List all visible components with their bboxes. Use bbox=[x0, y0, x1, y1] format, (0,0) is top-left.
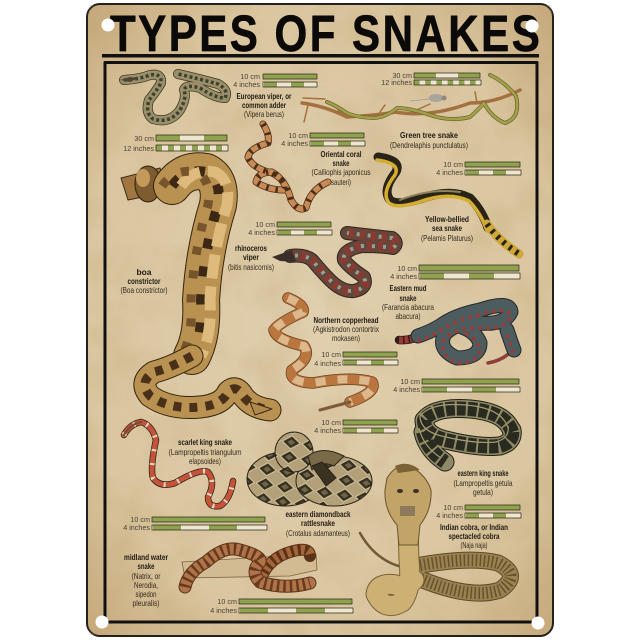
label: European viper: European viper, or bbox=[236, 91, 292, 101]
snake: Eastern mud snake bbox=[399, 305, 514, 363]
label: scarlet king snake: scarlet king snake bbox=[178, 437, 232, 447]
label: Oriental coral snake bbox=[312, 149, 370, 187]
label: European viper bbox=[236, 91, 292, 119]
label: rhinoceros viper bbox=[228, 243, 274, 272]
label: Indian cobra: spectacled cobra bbox=[448, 531, 500, 541]
label: boa constrictor: (Boa constrictor) bbox=[120, 285, 168, 295]
scale bar: Oriental coral snake: 10 cm bbox=[288, 131, 308, 140]
label: boa constrictor bbox=[120, 267, 168, 295]
mounting holes bbox=[96, 18, 544, 630]
label: Oriental coral snake: sauteri) bbox=[331, 177, 351, 187]
label: Green tree snake bbox=[390, 130, 468, 150]
scale bar: eastern diamondback rattlesnake: 10 cm bbox=[321, 418, 341, 427]
snake: scarlet king snake bbox=[124, 422, 233, 506]
scale bar: viper: 10 cm bbox=[240, 72, 260, 81]
scale bar: Indian cobra: 10 cm bbox=[443, 503, 463, 512]
scale bar: scarlet king snake: 4 inches bbox=[123, 523, 150, 532]
scale bar: Northern copperhead: 10 cm bbox=[321, 350, 341, 359]
label: Eastern mud snake bbox=[382, 283, 434, 321]
sign plate bbox=[87, 4, 553, 636]
label: Indian cobra bbox=[440, 522, 508, 550]
scale bar: boa bbox=[123, 134, 228, 153]
scale bar: viper bbox=[233, 72, 317, 89]
label: Eastern mud snake: (Farancia abacura bbox=[382, 302, 434, 312]
label: Oriental coral snake: Oriental coral bbox=[320, 149, 362, 159]
scale bar: Eastern mud snake: 10 cm bbox=[397, 264, 417, 273]
label: Yellow-bellied sea snake bbox=[421, 214, 473, 243]
label: eastern diamondback rattlesnake: (Crotalus adamanteus) bbox=[286, 528, 350, 538]
snake: European viper bbox=[120, 74, 226, 120]
label: eastern king snake: getula) bbox=[473, 487, 493, 497]
scale bar: Indian cobra: 4 inches bbox=[436, 511, 463, 520]
label: Green tree snake: (Dendrelaphis punctulatus) bbox=[390, 140, 468, 150]
label: midland water snake: sipedon bbox=[136, 589, 157, 599]
scale bar: Eastern mud snake: 4 inches bbox=[390, 272, 417, 281]
snake: Yellow-bellied sea snake bbox=[377, 157, 519, 254]
scale bar: Oriental coral snake bbox=[281, 131, 365, 148]
scale bar: eastern king snake: 4 inches bbox=[393, 385, 420, 394]
scale bar: rhinoceros viper: 10 cm bbox=[255, 220, 275, 229]
label: eastern diamondback rattlesnake bbox=[286, 509, 351, 538]
label: Northern copperhead bbox=[313, 315, 380, 343]
scale bar: Indian cobra bbox=[436, 503, 521, 520]
snake: Green tree snake on branch bbox=[302, 75, 520, 123]
scale bar: rhinoceros viper bbox=[248, 220, 332, 237]
label: scarlet king snake: elapsoides) bbox=[189, 456, 221, 466]
snake: Northern copperhead bbox=[274, 298, 373, 410]
label: Eastern mud snake: Eastern mud bbox=[390, 283, 426, 293]
label: midland water snake: Nerodia, bbox=[134, 580, 158, 590]
label: Yellow-bellied sea snake: Yellow-bellied bbox=[425, 214, 469, 224]
label: Indian cobra: (Naja naja) bbox=[460, 540, 488, 550]
icon: mouse bbox=[411, 94, 446, 102]
label: eastern king snake: eastern king snake bbox=[458, 468, 509, 478]
snake: Indian cobra bbox=[360, 464, 511, 606]
label: boa constrictor: constrictor bbox=[128, 276, 161, 286]
label: scarlet king snake: (Lampropeltis triangulum bbox=[168, 447, 242, 457]
label: midland water snake: snake bbox=[138, 561, 155, 571]
snake: rhinoceros viper bbox=[272, 233, 396, 291]
scale bar: scarlet king snake: 10 cm bbox=[130, 515, 150, 524]
label: Northern copperhead: mokasen) bbox=[332, 333, 360, 343]
scale bar: Northern copperhead bbox=[314, 350, 398, 368]
label: eastern diamondback rattlesnake: eastern diamondback bbox=[286, 509, 351, 519]
snake: midland water snake on branch bbox=[182, 549, 317, 587]
scale bar: Yellow-bellied sea snake: 10 cm bbox=[443, 160, 463, 169]
scale bar: Green tree snake: 12 inches bbox=[381, 78, 412, 87]
scale bar: Northern copperhead: 4 inches bbox=[314, 359, 341, 368]
scale bar: Yellow-bellied sea snake: 4 inches bbox=[436, 168, 463, 177]
scale bar: Eastern mud snake bbox=[390, 264, 520, 281]
label: Yellow-bellied sea snake: sea snake bbox=[432, 223, 462, 233]
label: Eastern mud snake: abacura) bbox=[396, 311, 421, 321]
scale bar: Green tree snake: 30 cm bbox=[392, 71, 412, 80]
label: European viper: (Vipera berus) bbox=[244, 109, 284, 119]
scale bar: midland water snake: 10 cm bbox=[217, 597, 237, 606]
label: boa constrictor: boa bbox=[136, 267, 152, 277]
label: eastern king snake bbox=[454, 468, 513, 497]
scale bar: viper: 4 inches bbox=[233, 80, 260, 89]
label: Eastern mud snake: snake bbox=[400, 293, 417, 303]
scale bar: eastern diamondback rattlesnake: 4 inches bbox=[314, 426, 341, 435]
label: Oriental coral snake: (Calliophis japonicus bbox=[312, 167, 370, 177]
label: eastern diamondback rattlesnake: rattlesnake bbox=[301, 518, 335, 528]
label: midland water snake bbox=[124, 552, 168, 608]
label: Northern copperhead: Northern copperhead bbox=[314, 315, 378, 325]
label: Yellow-bellied sea snake: (Pelamis Platurus) bbox=[421, 233, 473, 243]
label: Oriental coral snake: snake bbox=[332, 158, 350, 168]
scale bar: scarlet king snake bbox=[123, 515, 267, 532]
scale bar: eastern king snake: 10 cm bbox=[400, 377, 420, 386]
scale bar: Oriental coral snake: 4 inches bbox=[281, 139, 308, 148]
label: scarlet king snake bbox=[168, 437, 242, 466]
title: TYPES OF SNAKES bbox=[110, 5, 542, 62]
label: midland water snake: midland water bbox=[124, 552, 168, 562]
snake: eastern king snake bbox=[419, 404, 512, 462]
label: midland water snake: pleuralis) bbox=[132, 598, 160, 608]
label: midland water snake: (Natrix, or bbox=[132, 571, 161, 581]
label: eastern king snake: (Lampropeltis getula bbox=[454, 478, 513, 488]
snake: Oriental coral snake bbox=[248, 124, 328, 209]
scale bar: boa: 30 cm bbox=[134, 134, 154, 143]
scale bar: Green tree snake bbox=[381, 71, 481, 87]
label: rhinoceros viper: rhinoceros bbox=[235, 243, 267, 253]
scale bar: rhinoceros viper: 4 inches bbox=[248, 228, 275, 237]
label: European viper: common adder bbox=[242, 100, 286, 110]
label: Indian cobra: Indian cobra, or Indian bbox=[440, 522, 508, 532]
scale bar: boa: 12 inches bbox=[123, 144, 154, 153]
label: rhinoceros viper: (bitis nasicornis) bbox=[228, 262, 274, 272]
scale bar: eastern king snake bbox=[393, 377, 520, 394]
label: Green tree snake: Green tree snake bbox=[400, 130, 458, 140]
title rule bbox=[102, 54, 539, 58]
scale bar: midland water snake: 4 inches bbox=[210, 606, 237, 615]
scale bar: eastern diamondback rattlesnake bbox=[314, 418, 398, 435]
scale bar: midland water snake bbox=[210, 597, 353, 615]
snake: boa constrictor bbox=[121, 166, 272, 415]
label: Northern copperhead: (Agkistrodon contortrix bbox=[313, 324, 380, 334]
label: rhinoceros viper: viper bbox=[243, 252, 260, 262]
snake: eastern diamondback rattlesnake bbox=[247, 432, 372, 506]
scale bar: Yellow-bellied sea snake bbox=[436, 160, 521, 177]
frame border bbox=[105, 62, 537, 622]
